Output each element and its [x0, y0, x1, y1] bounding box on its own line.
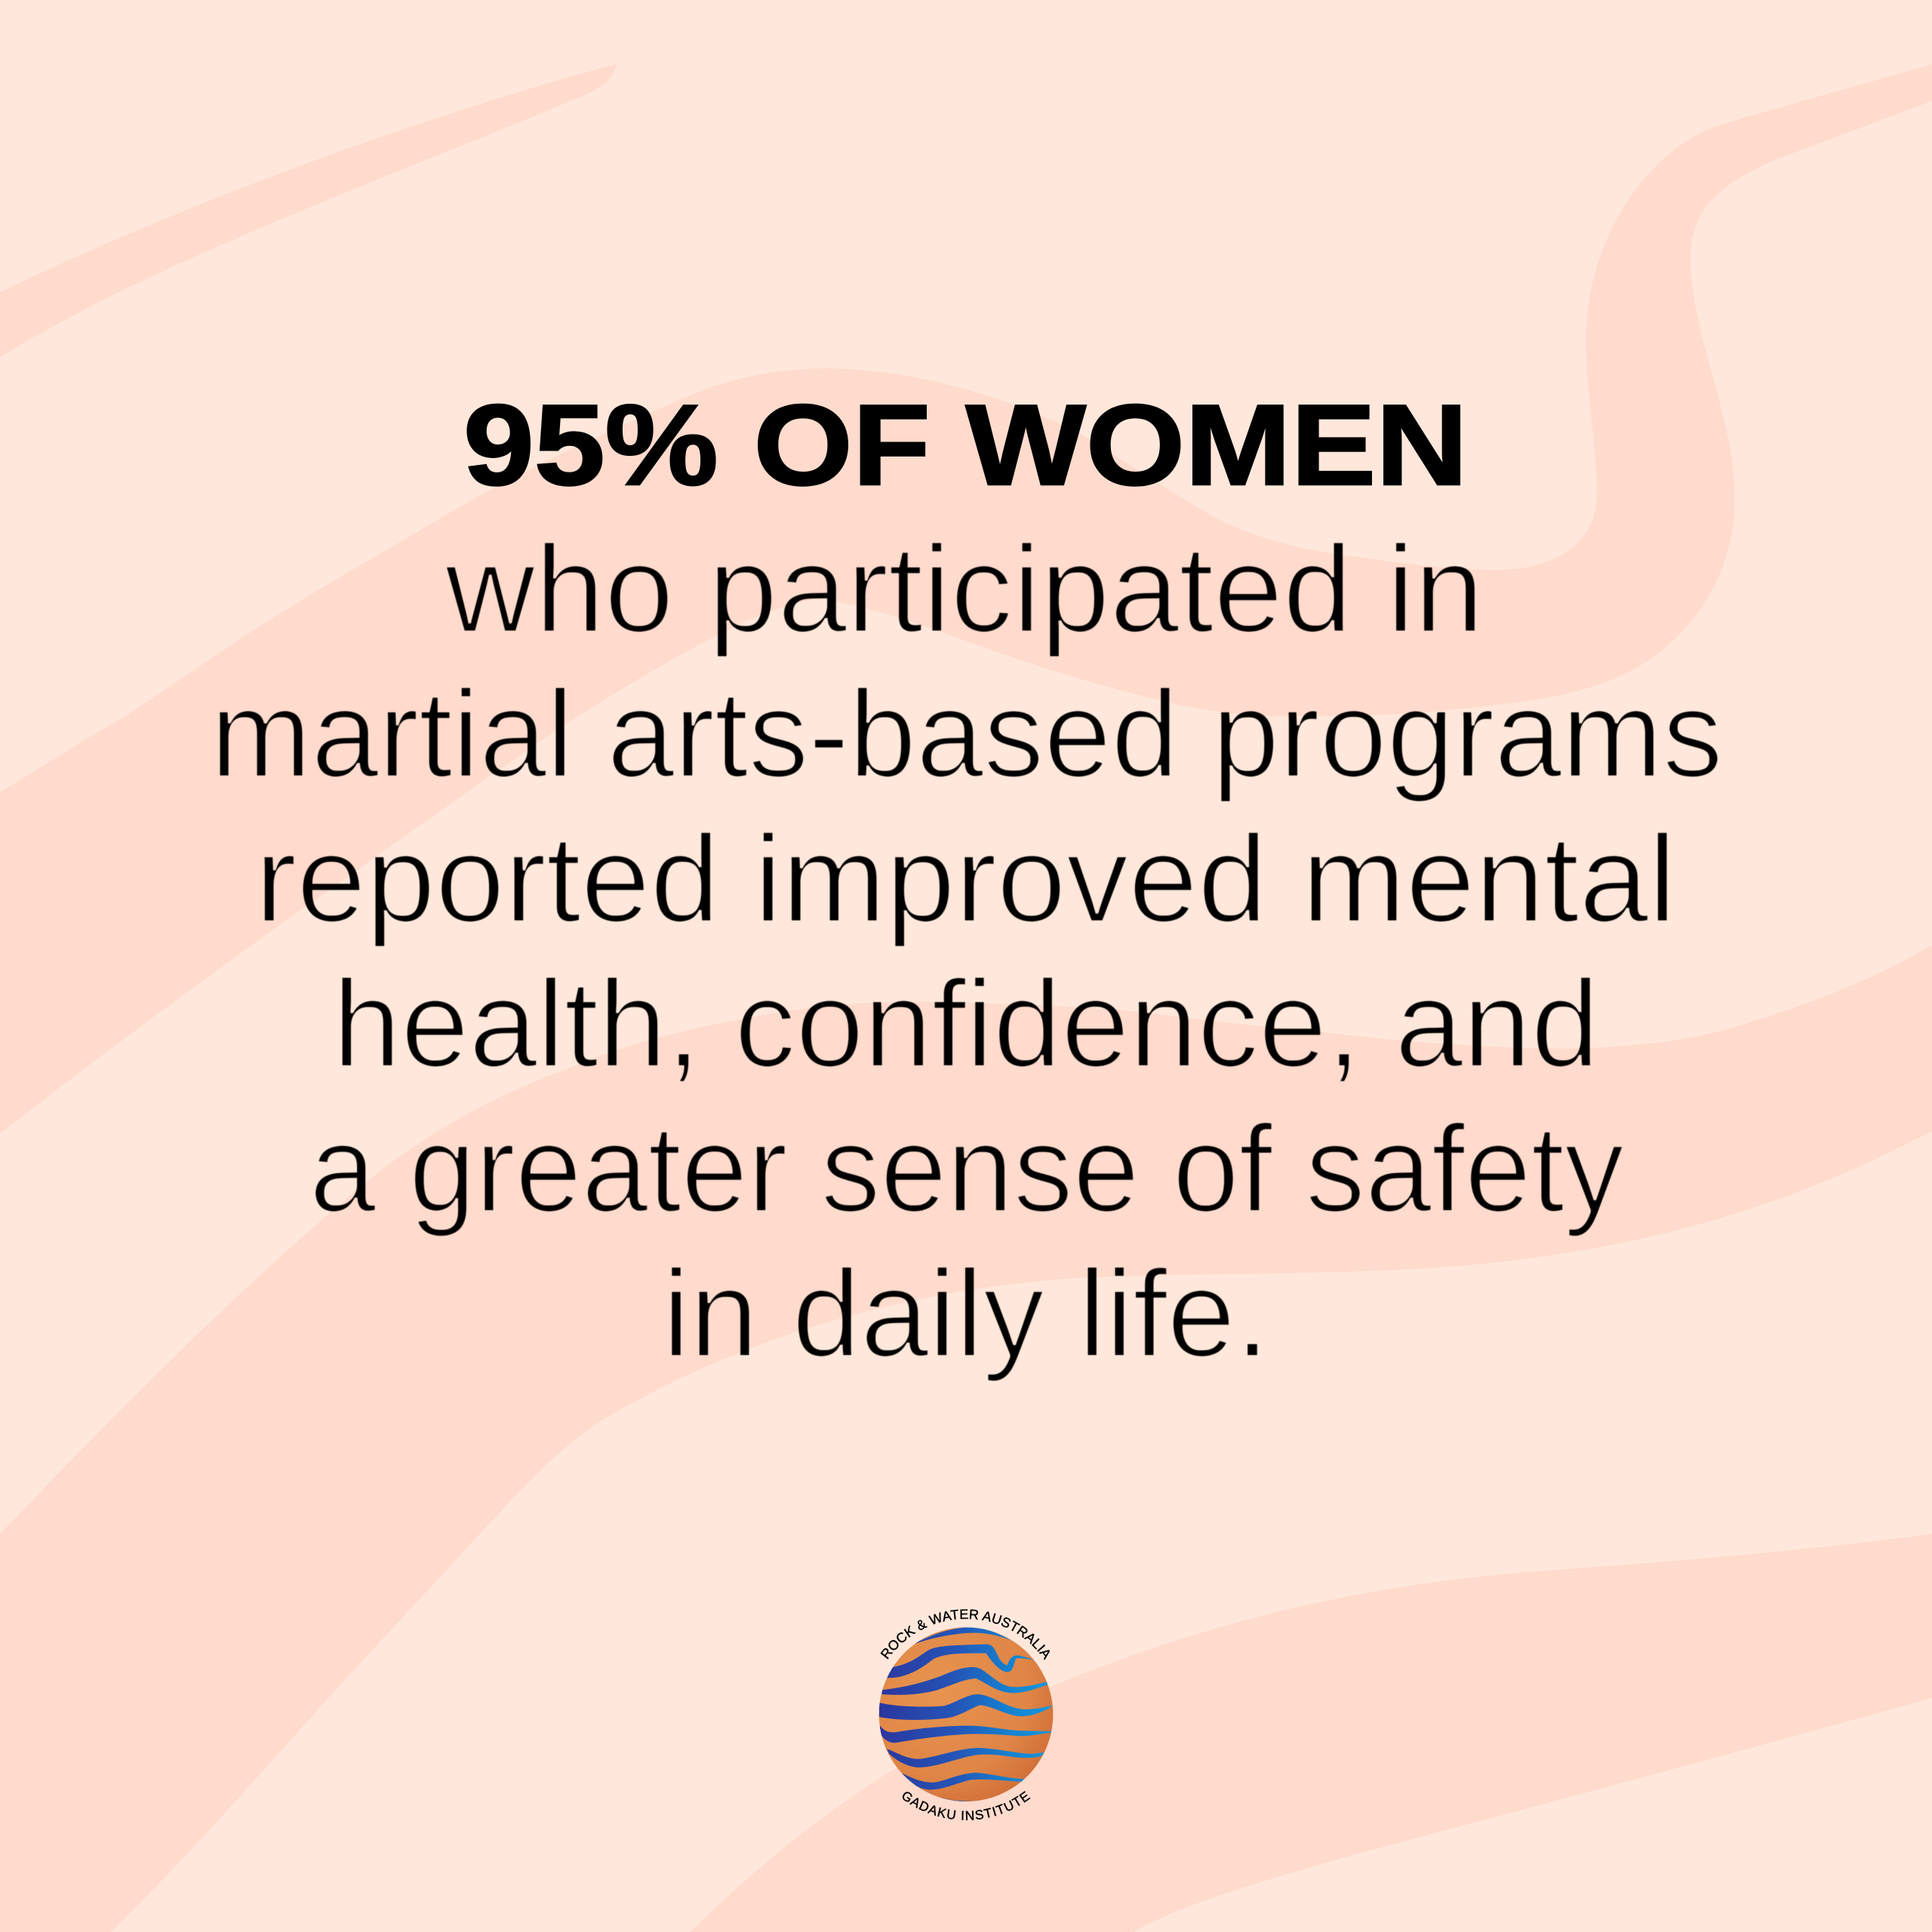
logo: Rock & Water Australia Gadaku Institute	[878, 1609, 1054, 1820]
logo water bands	[879, 1627, 1053, 1803]
body statement: a greater sense of safety	[309, 1100, 1624, 1238]
logo bottom ring text: GADAKU INSTITUTE	[903, 1791, 1031, 1820]
logo globe	[879, 1627, 1053, 1801]
body statement: in daily life.	[663, 1244, 1269, 1383]
headline: 95% OF WOMEN	[463, 381, 1468, 509]
body statement	[211, 520, 1723, 1383]
logo top ring text: ROCK & WATER AUSTRALIA	[880, 1609, 1051, 1660]
body statement: who participated in	[445, 520, 1484, 658]
body statement: martial arts-based programs	[211, 665, 1723, 803]
body statement: health, confidence, and	[333, 955, 1599, 1093]
body statement: reported improved mental	[255, 810, 1676, 948]
